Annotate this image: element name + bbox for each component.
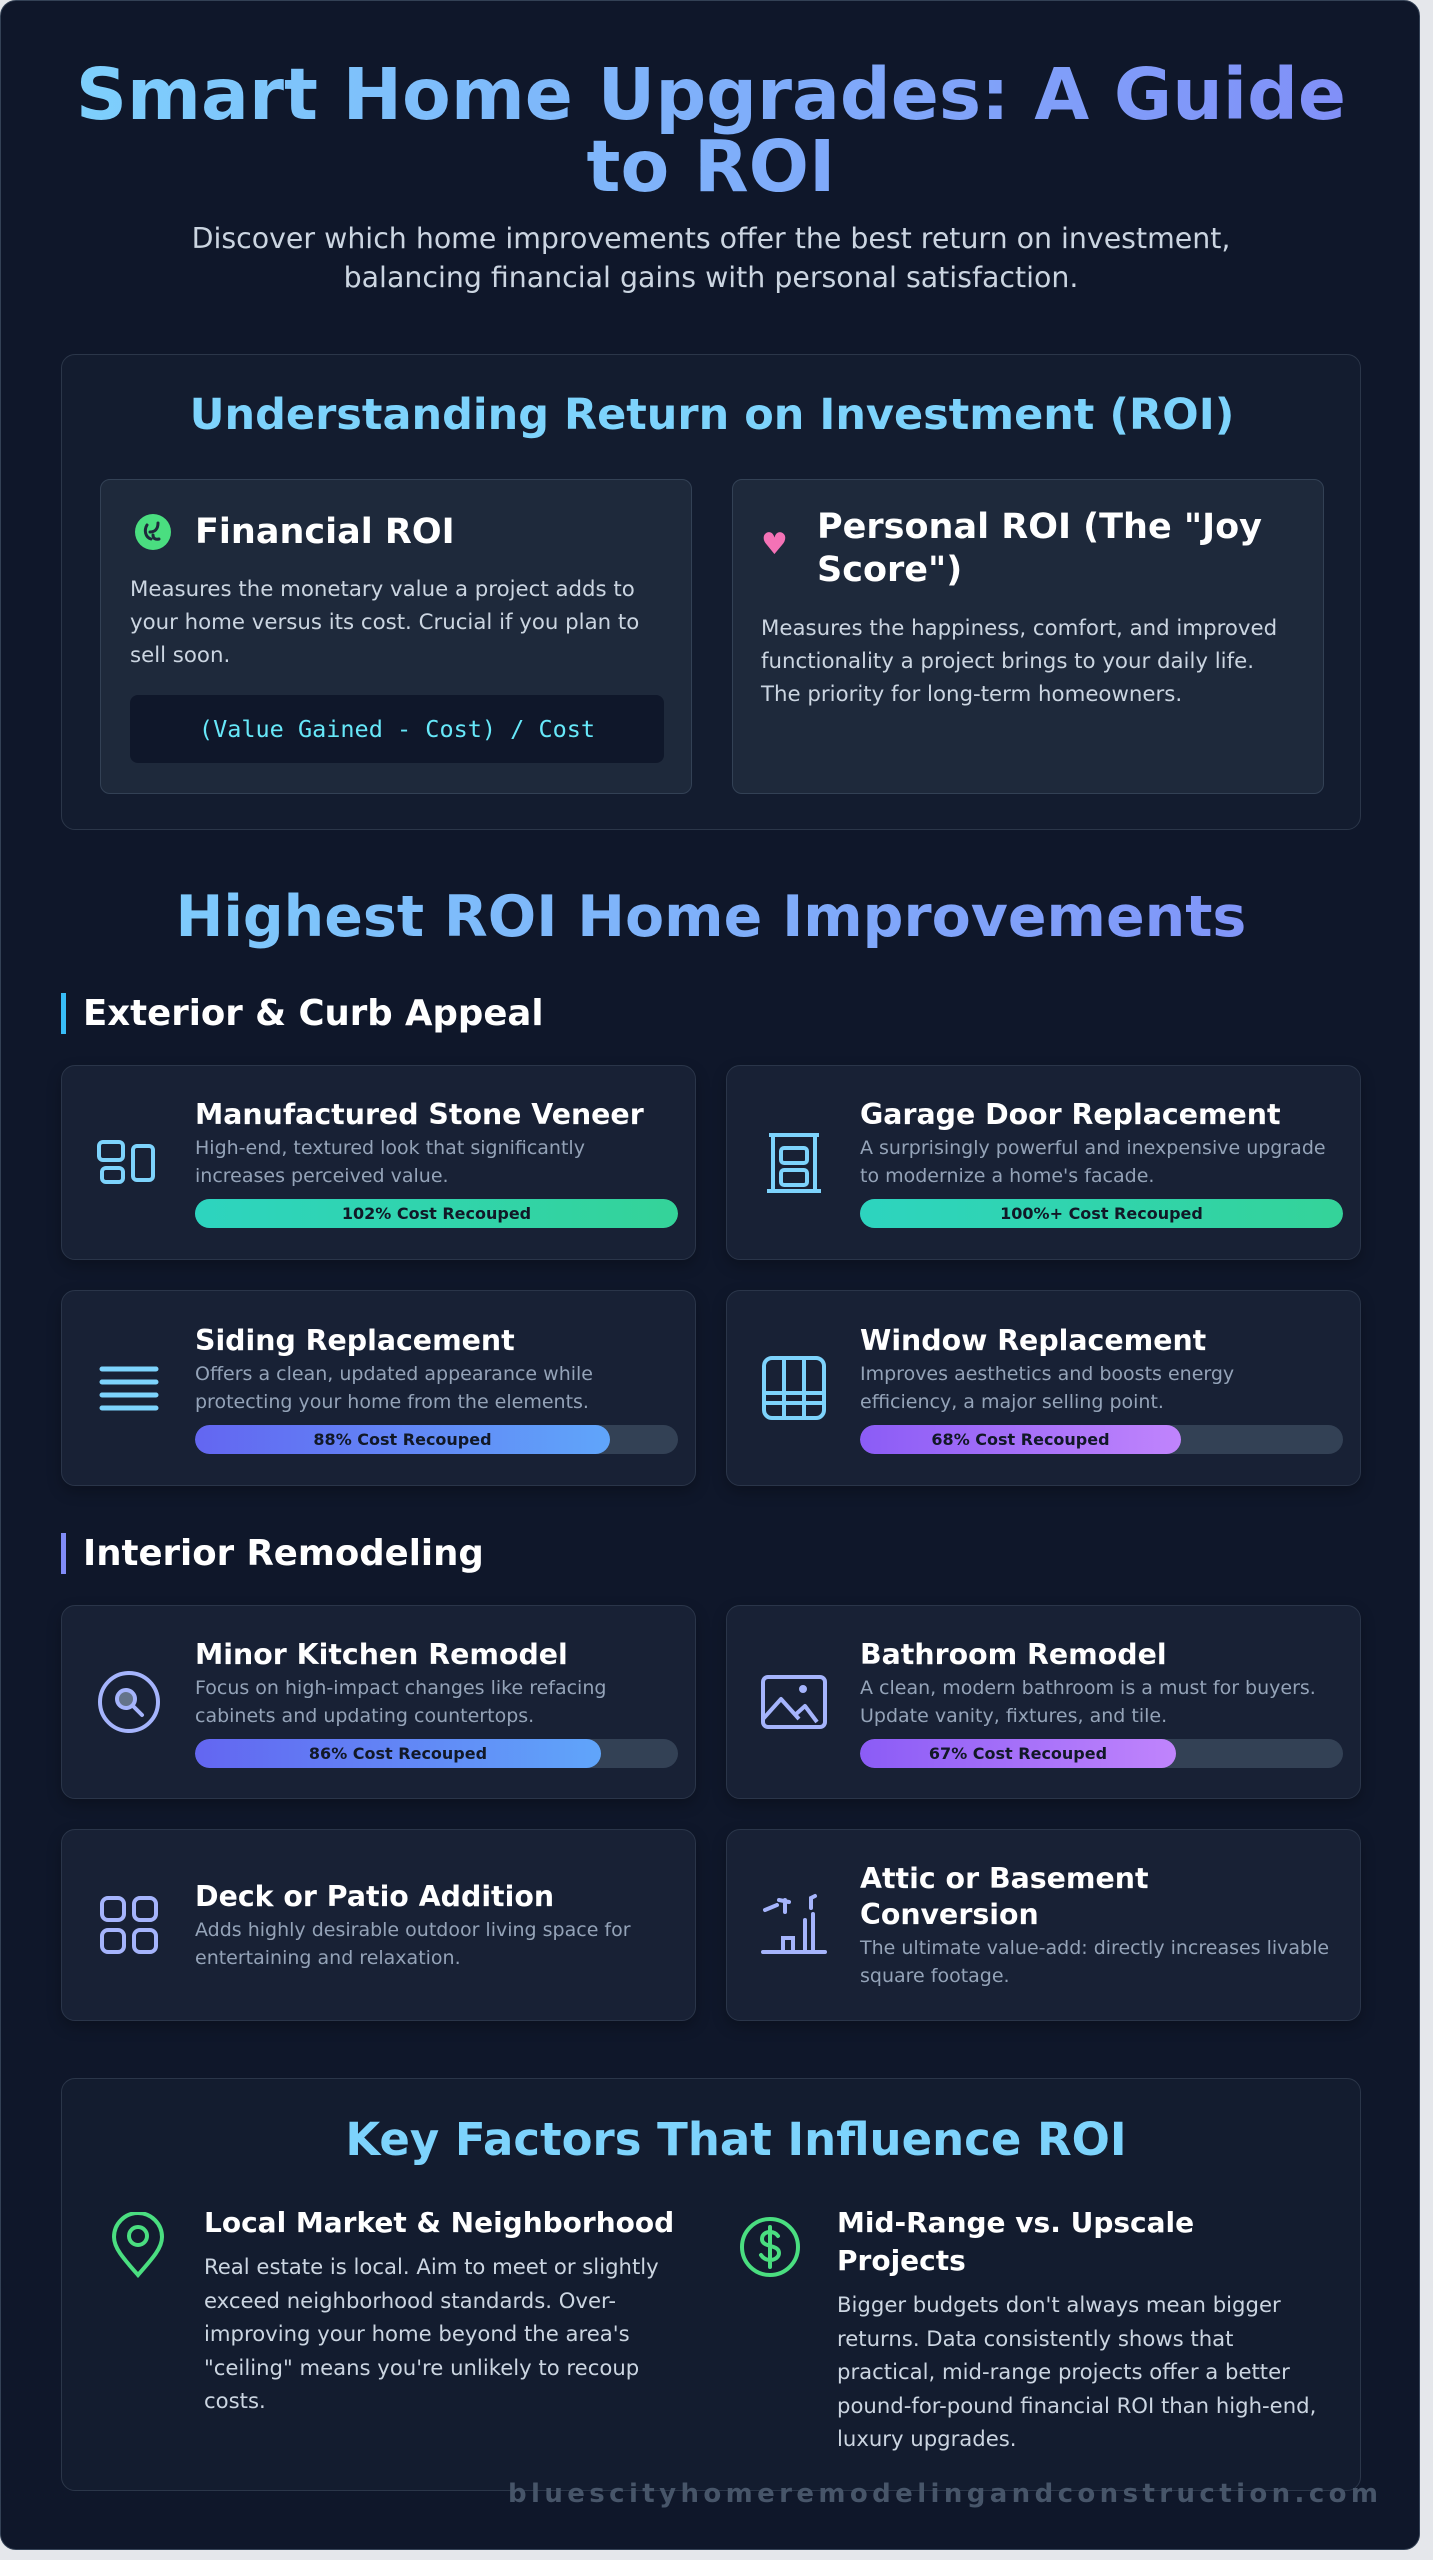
card: window: efficiency, a major selling point. — [860, 1390, 1164, 1412]
card: window: Improves aesthetics and boosts energy — [860, 1362, 1234, 1384]
heading: financial ROI: Financial ROI — [195, 512, 455, 552]
text: personal: Measures the happiness, comfort, and improved — [761, 616, 1277, 641]
text: local market — [204, 2254, 659, 2413]
card: deck — [61, 1829, 696, 2021]
title: local market: Local Market & Neighborhood — [204, 2206, 674, 2239]
card: attic — [726, 1829, 1361, 2021]
card: attic: The ultimate value-add: directly increases livable — [860, 1936, 1329, 1958]
bar: 102% — [195, 1199, 678, 1228]
card: attic: Attic or Basement — [860, 1862, 1149, 1894]
card: personal ROI — [732, 479, 1324, 794]
card: bathroom — [726, 1605, 1361, 1799]
bar: 68%: 68% Cost Recouped — [931, 1430, 1110, 1448]
card: financial ROI — [100, 479, 692, 794]
card: kitchen: Minor Kitchen Remodel — [195, 1638, 568, 1670]
icon: attic — [761, 1894, 827, 1954]
icon: heart: ♥ — [761, 527, 788, 562]
subtitle: Discover which home improvements offer the best return on investment, — [192, 222, 1230, 255]
text: financial: Measures the monetary value a project adds to — [130, 577, 635, 602]
text: local market: exceed neighborhood standards. Over- — [204, 2288, 616, 2312]
title — [1, 59, 1421, 203]
bar: 88%: 88% Cost Recouped — [313, 1430, 492, 1448]
bar: 86% — [195, 1738, 678, 1768]
card: kitchen — [61, 1605, 696, 1799]
card: stone veneer: Manufactured Stone Veneer — [195, 1098, 644, 1131]
heading: understanding ROI: Understanding Return on Investment (ROI) — [190, 390, 1234, 440]
bar: 100%+: 100%+ Cost Recouped — [1000, 1204, 1203, 1223]
text: personal: The priority for long-term homeowners. — [761, 682, 1182, 707]
icon: deck — [100, 1896, 158, 1954]
text: mid-range: pound-for-pound financial ROI than high-end, — [837, 2392, 1316, 2418]
title: mid-range — [837, 2206, 1194, 2277]
heading: key factors: Key Factors That Influence ROI — [345, 2113, 1127, 2166]
subtitle — [192, 222, 1230, 294]
text: personal: functionality a project brings to your daily life. — [761, 649, 1254, 674]
icon: pin — [112, 2212, 164, 2278]
card: deck: entertaining and relaxation. — [195, 1946, 461, 1968]
title: mid-range: Projects — [837, 2244, 966, 2277]
factor: local market — [112, 2206, 674, 2413]
text: local market: "ceiling" means you're unlikely to recoup — [204, 2354, 639, 2380]
factor: mid-range — [740, 2206, 1316, 2451]
heading: personal ROI: Personal ROI (The "Joy — [817, 507, 1262, 547]
icon: kitchen — [98, 1671, 160, 1733]
text: mid-range: luxury upgrades. — [837, 2426, 1017, 2451]
card: bathroom: Update vanity, fixtures, and tile. — [860, 1704, 1167, 1726]
card: siding: protecting your home from the elements. — [195, 1390, 589, 1412]
icon: garage — [767, 1133, 821, 1193]
bar: 86%: 86% Cost Recouped — [309, 1744, 487, 1762]
heading: highest ROI: Highest ROI Home Improvements — [176, 884, 1246, 950]
card: stone veneer: High-end, textured look that significantly — [195, 1137, 585, 1159]
card: bathroom: Bathroom Remodel — [860, 1638, 1167, 1670]
icon: siding — [100, 1366, 158, 1410]
icon: bathroom — [761, 1675, 827, 1729]
formula box: (Value Gained - Cost) / Cost — [199, 715, 595, 743]
card: kitchen: Focus on high-impact changes like refacing — [195, 1676, 606, 1698]
text: mid-range: Bigger budgets don't always mean bigger — [837, 2292, 1281, 2317]
card: siding: Offers a clean, updated appearance while — [195, 1362, 593, 1384]
bar: 67%: 67% Cost Recouped — [929, 1744, 1107, 1762]
card: garage door — [726, 1065, 1361, 1260]
bar: 67% — [860, 1738, 1343, 1768]
text: local market: costs. — [204, 2388, 266, 2413]
subtitle: balancing financial gains with personal satisfaction. — [344, 261, 1078, 294]
card: stone veneer — [61, 1065, 696, 1260]
card: attic: Conversion — [860, 1898, 1039, 1930]
card: siding — [61, 1290, 696, 1486]
card: window — [726, 1290, 1361, 1486]
text: personal — [760, 616, 1277, 707]
panel: key factors — [61, 2078, 1361, 2491]
card: garage door: A surprisingly powerful and inexpensive upgrade — [860, 1137, 1326, 1159]
bar: 100%+ — [860, 1199, 1343, 1228]
bar: 102%: 102% Cost Recouped — [342, 1204, 531, 1223]
subheading: interior: Interior Remodeling — [83, 1533, 484, 1574]
formula box — [130, 695, 664, 763]
card: attic: square footage. — [860, 1964, 1010, 1986]
card: deck: Deck or Patio Addition — [195, 1880, 554, 1912]
card: stone veneer: increases perceived value. — [195, 1165, 449, 1187]
card: garage door: Garage Door Replacement — [860, 1098, 1281, 1131]
bar: 68% — [860, 1424, 1343, 1454]
card: siding: Siding Replacement — [195, 1324, 515, 1356]
title: Smart Home Upgrades: A Guide — [76, 53, 1346, 136]
text: mid-range: practical, mid-range projects offer a better — [837, 2359, 1290, 2384]
text: mid-range — [837, 2292, 1316, 2451]
card: deck: Adds highly desirable outdoor living space for — [195, 1918, 631, 1940]
card: kitchen: cabinets and updating countertops. — [195, 1704, 534, 1726]
text: local market: improving your home beyond the area's — [204, 2321, 630, 2346]
text: mid-range: returns. Data consistently shows that — [837, 2326, 1233, 2350]
icon: financial — [135, 514, 171, 550]
heading: personal ROI: Score") — [817, 550, 962, 590]
panel: understanding ROI — [61, 354, 1361, 830]
title: mid-range: Mid-Range vs. Upscale — [837, 2206, 1194, 2239]
icon: stone — [97, 1140, 155, 1184]
card: window: Window Replacement — [860, 1324, 1206, 1356]
text: financial — [130, 577, 639, 668]
icon: dollar — [740, 2217, 800, 2277]
card: garage door: to modernize a home's facade. — [860, 1165, 1154, 1187]
card: bathroom: A clean, modern bathroom is a must for buyers. — [860, 1676, 1316, 1698]
title: to ROI — [587, 125, 835, 208]
text: financial: your home versus its cost. Crucial if you plan to — [130, 610, 639, 635]
text: financial: sell soon. — [130, 643, 230, 668]
subheading: exterior: Exterior & Curb Appeal — [83, 993, 544, 1034]
bar: 88% — [195, 1424, 678, 1454]
icon: window — [762, 1356, 826, 1420]
text: local market: Real estate is local. Aim to meet or slightly — [204, 2254, 659, 2279]
watermark: bluescityhomeremodelingandconstruction.com — [508, 2479, 1382, 2509]
heading: personal ROI — [817, 507, 1262, 590]
